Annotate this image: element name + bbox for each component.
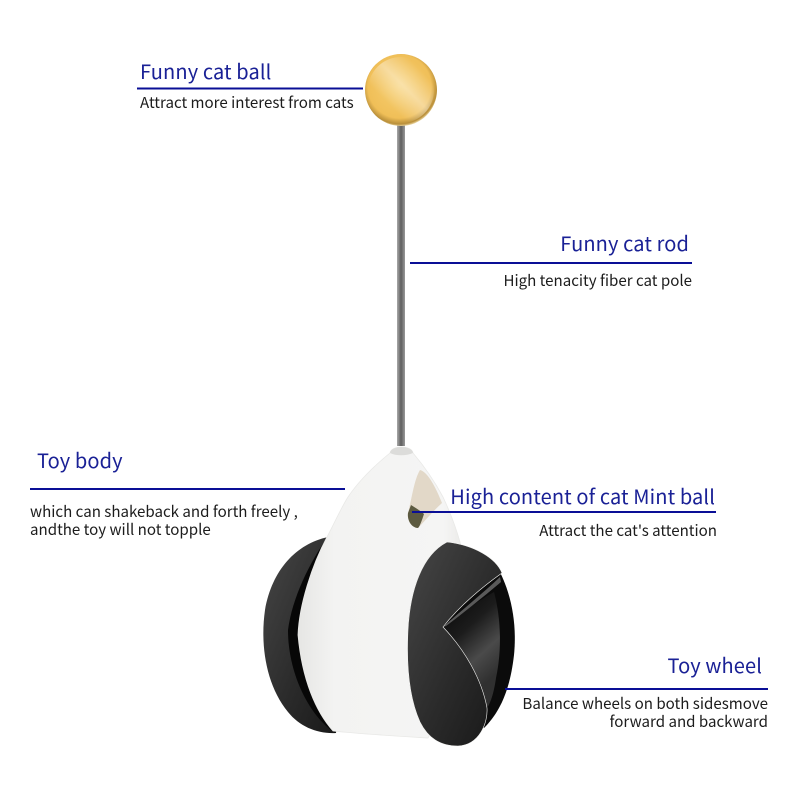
callout: toy body: andthe toy will not topple	[30, 518, 211, 540]
cat ball	[365, 54, 437, 126]
left wheel inner rim	[288, 538, 360, 733]
callout: funny cat rod	[410, 228, 692, 291]
callout: funny cat rod: Funny cat rod	[560, 228, 689, 257]
left wheel	[263, 537, 345, 733]
cat rod	[397, 120, 405, 446]
right wheel window	[443, 592, 500, 708]
body hole	[408, 470, 442, 528]
callout: funny cat ball: Funny cat ball	[140, 56, 271, 85]
body collar	[390, 447, 413, 455]
callout: funny cat rod: High tenacity fiber cat pole	[503, 269, 692, 291]
toy body	[298, 447, 480, 738]
callout: toy wheel: forward and backward	[610, 710, 768, 732]
callout: funny cat ball: Attract more interest from cats	[140, 91, 354, 113]
callout: mint ball: High content of cat Mint ball	[450, 481, 715, 510]
callout: toy body	[30, 445, 345, 540]
callout: toy wheel: Toy wheel	[667, 650, 762, 679]
callout: toy wheel	[505, 650, 768, 732]
callout: toy body: Toy body	[37, 445, 123, 474]
mint ball	[408, 505, 424, 528]
callout: mint ball	[412, 481, 717, 541]
right wheel disc	[438, 565, 515, 728]
right wheel lip	[443, 577, 501, 627]
callout: toy wheel: Balance wheels on both sidesmove	[522, 692, 768, 714]
callout: funny cat ball	[137, 56, 363, 113]
toy illustration	[263, 447, 515, 746]
right wheel shell	[408, 542, 502, 746]
callout: mint ball: Attract the cat's attention	[539, 519, 717, 541]
callout: toy body: which can shakeback and forth freely ,	[30, 500, 298, 522]
